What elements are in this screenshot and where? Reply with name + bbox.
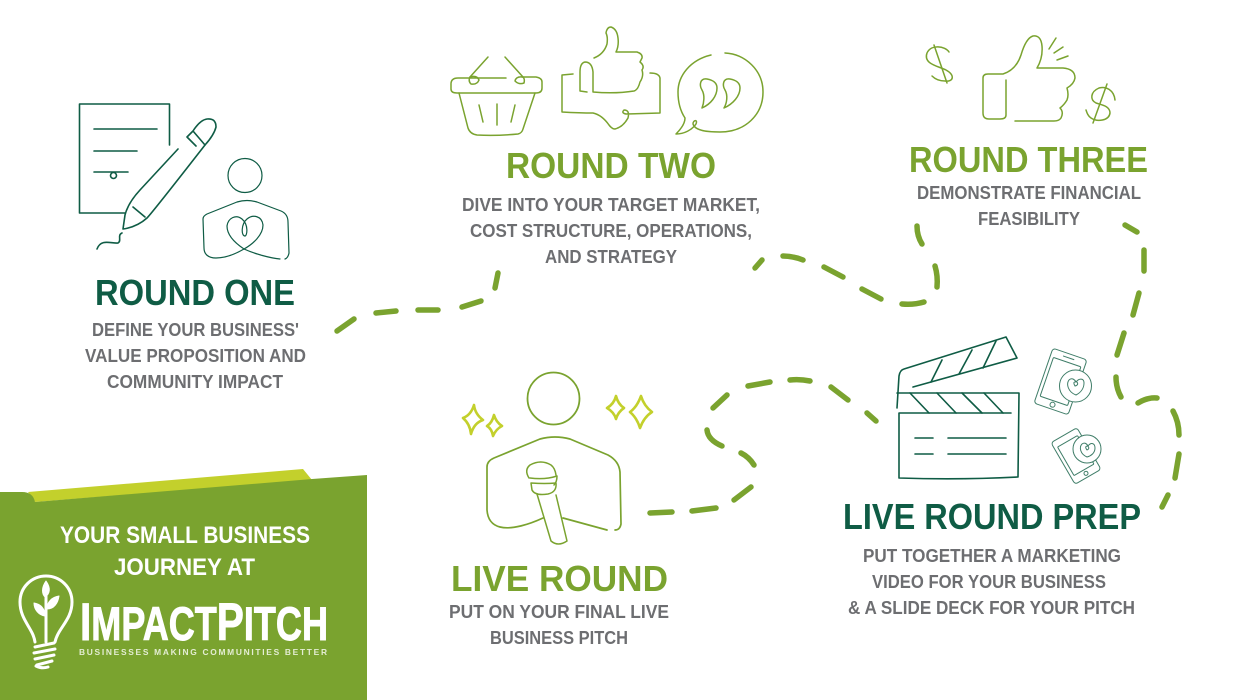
arrow: dashed path live round prep to live round: [650, 380, 876, 513]
logo wordmark: IMPACTPITCH: [80, 593, 328, 652]
panel: round three: [909, 36, 1148, 229]
panel: round one: [80, 104, 306, 392]
text: round three description: FEASIBILITY: [978, 209, 1080, 229]
text: round one description: VALUE PROPOSITION AND: [85, 346, 306, 366]
arrow: dashed path round one to round two: [337, 273, 498, 331]
heading: live round: LIVE ROUND: [451, 558, 668, 599]
text: round two description: [462, 195, 760, 267]
brand heading: YOUR SMALL BUSINESS: [60, 522, 310, 549]
icon: thumbs up with dollars: [926, 36, 1115, 123]
text: live round description: [449, 602, 669, 648]
icon: person with microphone: [487, 372, 621, 544]
heading: live round prep: LIVE ROUND PREP: [843, 496, 1141, 537]
logo wordmark: BUSINESSES MAKING COMMUNITIES BETTER: [79, 647, 327, 657]
text: round three description: DEMONSTRATE FINANCIAL: [917, 183, 1141, 203]
icon: thumbs up card: [562, 27, 660, 129]
panel: round two: [451, 27, 763, 267]
text: live round prep description: PUT TOGETHER A MARKETING: [863, 546, 1121, 566]
heading: round one: ROUND ONE: [95, 272, 295, 313]
arrow: dashed path round two to round three: [755, 226, 937, 304]
text: round one description: [85, 320, 306, 392]
text: live round description: PUT ON YOUR FINAL LIVE: [449, 602, 669, 622]
brand heading: [60, 522, 310, 581]
icon: clapperboard: [897, 337, 1019, 479]
text: round one description: COMMUNITY IMPACT: [107, 372, 283, 392]
icon: document, pen and person: [80, 104, 289, 259]
text: round one description: DEFINE YOUR BUSINESS': [92, 320, 299, 340]
text: round three description: [917, 183, 1141, 229]
heading: round two: ROUND TWO: [506, 145, 716, 186]
icon: phones with heart: [1034, 348, 1101, 484]
text: round two description: AND STRATEGY: [545, 247, 677, 267]
icon: sparkles: [463, 396, 652, 436]
panel: brand corner: [0, 469, 367, 700]
text: live round prep description: VIDEO FOR YOUR BUSINESS: [872, 572, 1106, 592]
panel: live round: [449, 372, 669, 648]
brand heading: JOURNEY AT: [114, 554, 255, 581]
panel: live round prep: [843, 337, 1141, 618]
text: live round prep description: & A SLIDE DECK FOR YOUR PITCH: [848, 598, 1135, 618]
icon: speech bubble: [676, 53, 763, 134]
text: round two description: DIVE INTO YOUR TARGET MARKET,: [462, 195, 760, 215]
arrow: dashed path round three to live round prep: [1116, 225, 1179, 507]
text: live round description: BUSINESS PITCH: [490, 628, 628, 648]
icon: light bulb logo: [20, 576, 72, 668]
icon: shopping basket: [451, 57, 542, 135]
text: round two description: COST STRUCTURE, OPERATIONS,: [470, 221, 752, 241]
heading: round three: ROUND THREE: [909, 139, 1148, 180]
text: live round prep description: [848, 546, 1135, 618]
